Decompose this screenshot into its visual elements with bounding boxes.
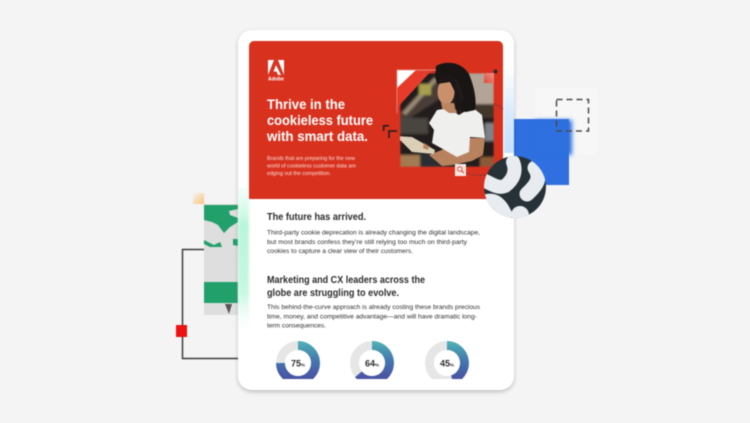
left connector lines [182, 250, 238, 358]
right decoration: blue square [514, 119, 572, 185]
donut charts [280, 346, 464, 380]
red triangle overlay [397, 70, 432, 108]
dotted connector lines [466, 104, 504, 175]
icon: Adobe logo: Adobe [268, 76, 284, 82]
ice glow on card edge [504, 68, 514, 153]
title [266, 96, 373, 144]
body text 1: but most brands confess they’re still relying too much on third-party [267, 239, 468, 246]
right decoration: pale square [535, 88, 597, 155]
card [238, 30, 514, 390]
body text 2: This behind-the-curve approach is already costing these brands precious [267, 304, 481, 311]
donut 45% [430, 346, 464, 380]
panel: red hero [249, 41, 503, 199]
body text 1: cookies to capture a clear view of their customers. [267, 248, 413, 255]
dashed selection square [556, 100, 588, 131]
hero description: Brands that are preparing for the new [267, 156, 355, 162]
title: with smart data. [266, 128, 368, 144]
pale red corner [484, 73, 494, 83]
dark anchor dot [494, 70, 498, 74]
body text 1: Third-party cookie deprecation is already changing the digital landscape, [267, 230, 480, 236]
heading: marketing and CX leaders: Marketing and CX leaders across the [267, 275, 425, 286]
red connector node [176, 325, 187, 337]
body text 2: time, money, and competitive advantage—and will have dramatic long- [267, 314, 477, 320]
orange fade square [193, 193, 204, 204]
thin triangle outline [397, 70, 436, 113]
donut 64% [354, 346, 390, 380]
icon: Adobe logo [268, 60, 284, 82]
patterned circle [483, 156, 546, 224]
hero description [266, 156, 356, 177]
donut 64%: 64% [365, 358, 379, 368]
donut 45%: 45% [440, 358, 454, 368]
heading: the future has arrived: The future has arrived. [267, 212, 366, 223]
mint glow on card edge [238, 188, 249, 338]
heading: marketing and CX leaders [267, 275, 425, 299]
title: cookieless future [267, 112, 373, 128]
left textured image strip [204, 204, 238, 315]
body text 2: term consequences. [267, 322, 326, 330]
hero description: edging out the competition. [267, 171, 331, 177]
title: Thrive in the [267, 96, 345, 112]
body text 1 [267, 230, 480, 255]
donut 75%: 75% [291, 358, 305, 368]
body text 2 [267, 304, 481, 330]
heading: marketing and CX leaders: globe are struggling to evolve. [267, 288, 399, 299]
photo: woman with tablet [396, 63, 494, 167]
hero description: world of cookieless customer data are [266, 164, 356, 170]
icon: search [455, 164, 466, 176]
donut 75% [280, 346, 316, 380]
corner bracket marks [384, 126, 397, 138]
white triangle overlay [397, 70, 416, 88]
